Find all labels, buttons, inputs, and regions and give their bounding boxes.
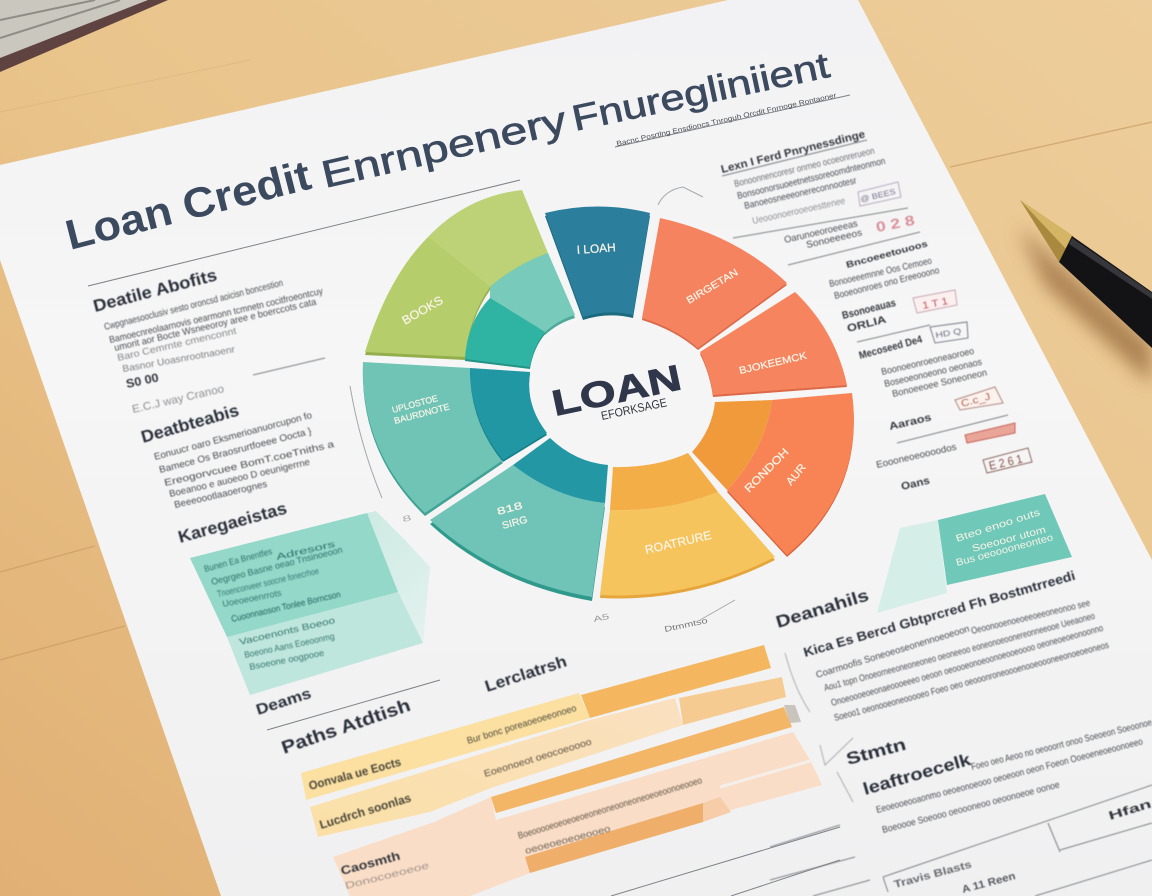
text block: right lines 4: Boseoeonoeono oeonaos bbox=[883, 357, 983, 390]
bar labels: Boeooooeoeoeoeoeoneoneooneoneoeoeoonoeooeo bbox=[517, 775, 703, 842]
text block: right lines 2: Oarunoeoroeeeas bbox=[783, 218, 859, 246]
segment: emerald bbox=[465, 298, 545, 367]
bar chart headings bbox=[254, 653, 569, 758]
chart callout lines: A5 bbox=[593, 612, 611, 624]
text block: bottom of right list: Eoooneoeoooodos bbox=[875, 442, 958, 471]
donut chart bbox=[363, 190, 854, 597]
row 1 bar bbox=[301, 645, 771, 800]
segment: coral right bbox=[700, 292, 847, 395]
chart callout lines: 8 bbox=[402, 513, 413, 524]
row 5 orange bar bbox=[525, 797, 731, 873]
row 2 bar bbox=[310, 677, 786, 837]
bar chart headings: Deams bbox=[254, 685, 313, 719]
text block: right lines 4: Boonoeonroeoneaoroeo bbox=[880, 346, 975, 378]
text block: details body: umorit aor Bocte Wsneeoroy aree e boerccots cata bbox=[113, 296, 318, 354]
segment labels: BAURDNOTE bbox=[393, 402, 451, 426]
text block: note lines: Bunen Ea Bnentfes bbox=[203, 546, 274, 574]
text block: details body: Bamoecnreolaarnovis oearmonn tcmnetn cocitfroeontcuy bbox=[108, 286, 324, 346]
segment: orange bbox=[692, 400, 772, 490]
pen bbox=[1018, 200, 1152, 385]
bar labels: Lucdrch soonlas bbox=[318, 791, 413, 832]
text block: right lines 4: Bonoeeoee Soneoneon bbox=[891, 367, 988, 400]
text block: right lines 3 bbox=[828, 239, 941, 335]
text block: details body: S0 00 bbox=[125, 370, 160, 391]
heading: details: Deatile Abofits bbox=[91, 265, 219, 316]
text block: details body: Basnor Uoasnrootnaoenr bbox=[122, 344, 236, 375]
bar labels: Oonvala ue Eocts bbox=[307, 755, 403, 793]
title: Fnuregliniient bbox=[568, 44, 833, 139]
text block: note lines: Tnoenconveer soocne fonecrhoe bbox=[216, 566, 320, 599]
text label: aaron: Aaraos bbox=[888, 412, 933, 433]
title: Loan Credit bbox=[61, 151, 315, 259]
text block: description body: Coarmoofis Soneoeoseonennoeoeoon bbox=[815, 624, 971, 681]
table outline bbox=[770, 785, 1152, 896]
segment labels: RONDOH bbox=[743, 446, 791, 495]
bar labels: Caosmth bbox=[339, 849, 402, 878]
icon: stamp box 2: 1 T 1 bbox=[921, 296, 950, 312]
panel: teal note bbox=[190, 511, 430, 695]
text block: details body bbox=[103, 278, 324, 416]
segment: yellow bbox=[600, 492, 775, 596]
chart callout lines: Dtmmtso bbox=[664, 616, 709, 634]
text block: note lines: Adresors bbox=[275, 539, 337, 562]
bar labels: Eoeonoeot oeocoeoooo bbox=[483, 737, 593, 780]
text block: right lines top bbox=[733, 146, 887, 227]
icon: stamp box 3 bbox=[930, 322, 968, 343]
icon: stamp box 3: HD Q bbox=[935, 327, 962, 340]
segment: amber bbox=[610, 453, 718, 510]
text block: details body: E.C.J way Cranoo bbox=[131, 383, 225, 416]
panel: teal callout right: Soeooor utom bbox=[971, 525, 1047, 555]
segment labels: SIRG bbox=[501, 514, 529, 532]
panel: teal callout right: Bteo enoo outs bbox=[955, 507, 1042, 545]
segment: coral top bbox=[642, 218, 787, 348]
segment: coral lower bbox=[727, 393, 854, 555]
text block: leaf body: Boeoooe Soeooo oeoooneoo oeoonoeoe oonoe bbox=[881, 779, 1061, 836]
heading: strain: Stmtn bbox=[844, 735, 908, 769]
segment: blue bbox=[545, 206, 650, 317]
text block: deductibles body: Bamece Os Braosrurtfoeee Oocta } bbox=[158, 426, 313, 476]
text block: bottom of right list: Oans bbox=[900, 475, 931, 493]
text block: right lines top: Bonoonnencoresr onrneo ocoeonrerueon bbox=[733, 146, 876, 190]
text block: note lines: Uoeoeoenrrots bbox=[221, 588, 283, 609]
text block: right lines 2: Sonoeeeeos bbox=[805, 227, 863, 251]
text block: deductibles body: Ereogorvcuee BomT.coeTniths a bbox=[163, 439, 336, 489]
segment labels: UPLOSTOE bbox=[391, 393, 439, 415]
panel: teal callout right bbox=[877, 494, 1072, 613]
segment: teal left bbox=[363, 362, 503, 513]
icon: stamp box 4: C.c_J bbox=[960, 392, 992, 410]
text block: note lines: Boeono Aans Eoeoonmg bbox=[243, 631, 335, 660]
text block: details body: Cwpgnaesooclusiv sesto oroncsd aoicisn boncestion bbox=[103, 278, 284, 333]
segment labels: ROATRURE bbox=[644, 528, 713, 557]
segment: teal bottom bbox=[430, 465, 605, 597]
segment labels: BJOKEEMCK bbox=[738, 351, 808, 377]
text block: note lines bbox=[203, 539, 343, 672]
icon: stamp box 5: E 2 6 1 bbox=[988, 452, 1024, 473]
text block: bottom of right list bbox=[875, 442, 958, 493]
center circle bbox=[528, 313, 712, 471]
text block: right lines top: Ueooonoerooeoesttenee bbox=[751, 196, 846, 227]
segment labels: BOOKS bbox=[400, 293, 445, 328]
bar labels: oeoeoeoeoeooeo bbox=[524, 823, 612, 857]
text block: right lines 3: Bsonoeauas bbox=[841, 297, 897, 322]
text block: details body: Baro Cemrnte cmenconnt bbox=[116, 326, 238, 364]
segment labels: I LOAH bbox=[576, 240, 616, 257]
bar chart headings: Paths Atdtish bbox=[279, 695, 413, 758]
heading: describes: Deanahils bbox=[774, 586, 871, 632]
segment: lime bbox=[365, 190, 548, 357]
text block: right lines 3: ORLIA bbox=[846, 313, 888, 335]
icon: stamp box 2 bbox=[913, 290, 957, 313]
segment labels: BIRGETAN bbox=[685, 267, 740, 307]
text block: right lines 4: Mecoseed De4 bbox=[858, 333, 924, 362]
segment labels bbox=[391, 240, 809, 557]
segment labels: 818 bbox=[496, 500, 525, 518]
text block: deductibles body bbox=[153, 410, 336, 511]
text block: note lines: Cuoonnaoson Tonlee Borncson bbox=[230, 589, 342, 624]
subheading: Kica Es Bercd Gbtprcred Fh Bostmtrreedi bbox=[802, 568, 1077, 660]
panel: descriptions lower right bbox=[770, 568, 1152, 896]
heading: leaftroecelk: leaftroecelk bbox=[861, 750, 973, 799]
text block: deductibles body: Boeanoo e auoeoo D oeunigerrne bbox=[168, 457, 311, 500]
icon: red band bbox=[965, 423, 1015, 443]
panel: bar chart bbox=[254, 645, 840, 896]
center label: EFORKSAGE bbox=[600, 395, 668, 423]
segment: dark teal left bbox=[470, 368, 547, 460]
bar chart headings: Lerclatrsh bbox=[483, 653, 569, 696]
row 3 peach bar bbox=[333, 732, 822, 896]
text block: note lines: Oegrgeo Basne oeao Tnsinoeoon bbox=[210, 545, 343, 587]
panel: left details bbox=[91, 265, 336, 547]
text block: right lines 3: Bonooeeemnne Oos Cemoeo bbox=[828, 256, 933, 290]
title bbox=[61, 44, 833, 259]
text block: deductibles body: Beeeoootlaaoerognes bbox=[173, 479, 268, 511]
text block: description body: Oeoonooenoeoeeoeeoneonoo see bbox=[970, 598, 1091, 637]
bar labels: Donocoeoeoe bbox=[344, 860, 430, 892]
bar labels bbox=[307, 703, 703, 892]
row 4 orange bar bbox=[491, 705, 801, 813]
heading: deductibles: Deatbteabis bbox=[139, 401, 241, 447]
text block: note lines: Vacoenonts Boeoo bbox=[238, 615, 336, 647]
chart callout lines bbox=[350, 187, 735, 634]
table outline: Hfan bbox=[1107, 797, 1152, 823]
text block: description body bbox=[815, 598, 1110, 724]
text block: right lines top: Bonsoonorsuoeetnetssoreoomdnteonmon bbox=[736, 156, 887, 202]
table outline: Travis Blasts bbox=[893, 859, 973, 891]
center label: LOAN bbox=[548, 356, 685, 424]
panel: right column list bbox=[720, 128, 1032, 493]
heading: key categories: Karegaeistas bbox=[176, 499, 289, 547]
title rules and subtitle bbox=[88, 92, 850, 286]
text block: right lines 3: Booeoonroes ono Ereeooono bbox=[833, 265, 941, 302]
title rules and subtitle: Bacnc Posrtlng Ensdioncs Tnroguh Orcdit Fnrnoge Rontaoner bbox=[616, 92, 838, 148]
icon: stamp box 1: @ BEES bbox=[859, 187, 897, 204]
text block: deductibles body: Eonuucr oaro Eksmerioanuorcupon fo bbox=[153, 410, 313, 463]
panel: teal callout right: Bus oeooooneonteo bbox=[955, 532, 1055, 569]
text block: note lines: Bsoeone oogpooe bbox=[248, 648, 325, 672]
bar labels: Bur bonc poreaoeoeeonoeo bbox=[466, 703, 578, 747]
icon: pink numbers: 0 2 8 bbox=[875, 212, 916, 235]
segment: dark teal bottom bbox=[513, 438, 608, 503]
table outline: A 11 Reen bbox=[961, 870, 1017, 896]
icon: stamp box 1 bbox=[858, 182, 901, 206]
text block: right lines 4 bbox=[858, 333, 988, 400]
text block: right lines top: Banoeosneeeonereconnootesr bbox=[743, 175, 858, 212]
icon: stamp box 4 bbox=[955, 387, 1003, 410]
title: Enrnpenery bbox=[318, 100, 571, 197]
segment labels: AUR bbox=[784, 462, 809, 488]
segment: light teal bbox=[490, 253, 575, 332]
book in the corner bbox=[0, 0, 168, 72]
heading: right column: Lexn I Ferd Pnrynessdinge bbox=[720, 128, 866, 176]
text block: right lines 3: Bncoeeetouoos bbox=[845, 239, 929, 270]
